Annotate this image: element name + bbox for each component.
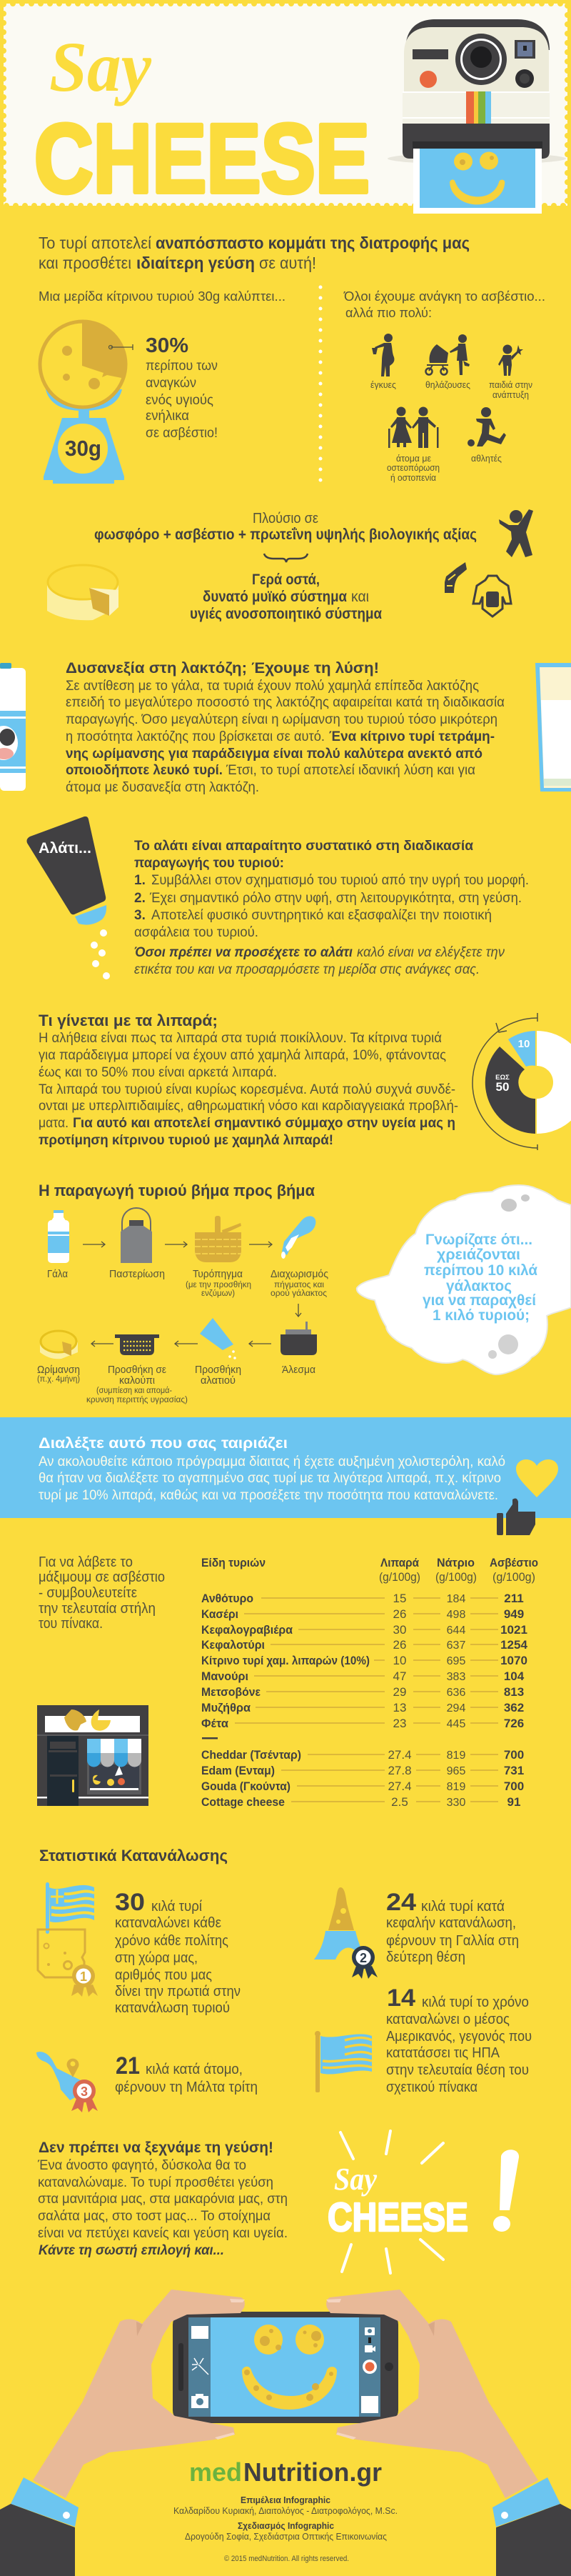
text block: taste: στα μανιτάρια μας, στα μακαρόνια μας, στη — [38, 2192, 288, 2207]
text block: taste — [37, 2140, 288, 2258]
text block: intro: και προσθέτει — [39, 254, 131, 272]
labels: steps row 1: Διαχωρισμός — [271, 1268, 328, 1280]
table: cheese types: 636 — [447, 1687, 465, 1699]
label: athletes: αθλητές — [471, 453, 502, 464]
table: cheese types: 26 — [393, 1607, 406, 1621]
stat: 14 kg USA: κατατάσσει τις ΗΠΑ — [386, 2045, 500, 2061]
icon: torso — [473, 576, 511, 616]
labels: steps row 2: αλατιού — [201, 1374, 236, 1387]
icon: cheese on scale — [40, 321, 127, 484]
labels: steps row 1: πήγματος και — [274, 1281, 324, 1289]
table: cheese types: 10 — [393, 1654, 406, 1667]
table: cheese types: 1070 — [500, 1654, 527, 1667]
icon: USA flag — [315, 2031, 372, 2092]
panel: choose band: Αν ακολουθείτε κάποιο πρόγραμμα δίαιτας ή έχετε αυξημένη χολιστερόλη, καλό — [39, 1454, 505, 1469]
icon: step salt — [200, 1318, 236, 1359]
stat: 21 kg Malta — [115, 2052, 258, 2095]
text block: taste: σαλάτα μας, στο τοστ μας... Το στοίχημα — [38, 2209, 271, 2224]
labels: steps row 2: Ωρίμανση — [37, 1364, 80, 1376]
panel: choose band: θα ήταν να διαλέξετε το αγαπημένο σας τυρί με τα λιγότερα λιπαρά, π.χ. κίτρινο — [39, 1471, 501, 1486]
icon: heart — [516, 1459, 558, 1497]
labels: steps row 2: καλούπι — [119, 1374, 155, 1387]
text block: lactose: νης ωρίμανσης για παράδειγμα είναι πολύ καλύτερα ανεκτό από — [66, 747, 482, 762]
table: cheese types: 29 — [393, 1685, 406, 1699]
icon: mother with stroller — [425, 334, 470, 375]
labels: steps row 1: Τυρόπηγμα — [193, 1268, 243, 1280]
text block: credits — [173, 2495, 398, 2563]
table: cheese types: Κασέρι — [201, 1607, 238, 1621]
text block: taste: Δεν πρέπει να ξεχνάμε τη γεύση! — [39, 2140, 273, 2156]
stat: 14 kg USA: σχετικού πίνακα — [386, 2080, 477, 2095]
callout: did you know cloud: γάλακτος — [446, 1278, 512, 1294]
stat: 30 kg Greece: καταναλώνει κάθε — [115, 1915, 221, 1931]
labels: steps row 2: (συμπίεση και απομά- — [96, 1387, 172, 1395]
stat: 24 kg France: 24 — [386, 1889, 416, 1916]
table: cheese types: 2.5 — [391, 1795, 408, 1809]
icon: cheese on scale: 30g — [65, 436, 101, 461]
labels: steps row 2: Προσθήκη — [195, 1364, 241, 1376]
text block: benefits: και — [351, 589, 369, 605]
text block: lactose: Ένα κίτρινο τυρί τετράμη- — [329, 729, 495, 744]
callout: did you know cloud: περίπου 10 κιλά — [424, 1262, 537, 1279]
table: cheese types: Edam (Ενταμ) — [201, 1764, 275, 1777]
table: cheese types: 695 — [447, 1655, 465, 1667]
table: cheese types: (g/100g) — [492, 1570, 535, 1584]
title: CHEESE — [34, 104, 370, 214]
text: who needs calcium: αλλά πιο πολύ: — [345, 306, 432, 320]
stat: 14 kg USA: στην τελευταία θέση του — [386, 2062, 529, 2078]
labels: steps row 2: Προσθήκη σε — [108, 1364, 166, 1376]
table: cheese types: 949 — [504, 1607, 524, 1621]
stat: 24 kg France: κεφαλήν κατανάλωση, — [386, 1915, 516, 1931]
arrow — [175, 1341, 198, 1347]
table: cheese types: 383 — [447, 1671, 465, 1683]
text block: salt: παραγωγής του τυριού: — [134, 856, 284, 871]
label: osteoporosis: ή οστοπενία — [390, 472, 436, 483]
table: cheese types: 819 — [447, 1749, 465, 1762]
text block: credits: Σχεδιασμός Infographic — [238, 2520, 334, 2531]
icon: salt shaker — [27, 817, 110, 979]
icon: cheese shop — [37, 1705, 148, 1806]
table: cheese types: Κεφαλοτύρι — [201, 1638, 265, 1652]
table: cheese types: 637 — [447, 1639, 465, 1652]
text: who needs calcium — [343, 289, 545, 320]
labels: steps row 1: ορού γάλακτος — [271, 1289, 327, 1298]
icon: Greek flag, cheese and first medal: 1 — [80, 1970, 87, 1984]
labels: steps row 2: (π.χ. 4μήνη) — [37, 1375, 80, 1384]
text block: salt: καλό είναι να ελέγξετε την — [357, 945, 505, 960]
icon: Greek flag, cheese and first medal — [38, 1882, 98, 1997]
panel: header — [4, 4, 567, 206]
labels: steps row 1: Παστερίωση — [109, 1268, 165, 1280]
text block: calcium advice: Για να λάβετε το — [39, 1554, 133, 1570]
icon: Malta and third medal — [36, 2052, 98, 2112]
callout: did you know cloud — [357, 1185, 571, 1374]
callout: 30 percent: ενός υγιούς — [146, 393, 213, 408]
arrow — [165, 1242, 187, 1247]
title: Say — [49, 27, 152, 106]
table: cheese types: Ανθότυρο — [201, 1592, 253, 1605]
stat: 30 kg Greece: αριθμός που μας — [115, 1967, 212, 1983]
text block: lactose: άτομα με δυσανεξία στη λακτόζη. — [66, 780, 259, 795]
text block: lactose: η ποσότητα λακτόζης που βρίσκεται σε αυτό. — [66, 729, 325, 744]
table: cheese types: (g/100g) — [435, 1570, 477, 1584]
stat: 24 kg France: φέρνουν τη Γαλλία στη — [386, 1933, 519, 1949]
table: cheese types: Gouda (Γκούντα) — [201, 1779, 290, 1793]
text block: lactose — [66, 660, 505, 795]
stat: 24 kg France: κιλά τυρί κατά — [421, 1899, 505, 1914]
callout: 30 percent: σε ασβέστιο! — [146, 426, 218, 441]
stat: 14 kg USA: Αμερικανός, γεγονός που — [386, 2029, 532, 2045]
callout: 30 percent: περίπου των — [146, 359, 218, 374]
table: cheese types: 498 — [447, 1609, 465, 1621]
text block: benefits: Γερά οστά, — [252, 571, 320, 588]
stat: 21 kg Malta: 21 — [116, 2052, 140, 2080]
callout: 30 percent: αναγκών — [146, 376, 196, 391]
icon: step mould — [115, 1334, 159, 1355]
icon: cheese wheel — [47, 565, 118, 620]
text block: taste: Κάντε τη σωστή επιλογή και... — [39, 2243, 224, 2258]
icon: pregnant woman — [372, 334, 394, 376]
text block: rich in — [94, 511, 477, 543]
table: cheese types: 23 — [393, 1717, 406, 1730]
icon: left hand and sleeve — [0, 2290, 245, 2576]
table: cheese types: 27.4 — [388, 1748, 412, 1762]
table: cheese types: 644 — [447, 1624, 465, 1637]
text: serving lead-in: Μια μερίδα κίτρινου τυριού 30g καλύπτει... — [39, 289, 286, 304]
label: breastfeeding: θηλάζουσες — [425, 379, 470, 390]
callout: did you know cloud: χρειάζονται — [437, 1247, 520, 1263]
text block: lactose: επειδή το μεγαλύτερο ποσοστό της λακτόζης αφαιρείται κατά τη διαδικασία — [66, 695, 505, 710]
icon: France cheese tower and second medal — [314, 1887, 378, 1979]
table: cheese types: 294 — [447, 1702, 465, 1714]
heading: statistics: Στατιστικά Κατανάλωσης — [39, 1847, 228, 1864]
table: cheese types: 700 — [504, 1748, 524, 1762]
stat: 14 kg USA — [386, 1985, 532, 2095]
text block: salt: 2. — [134, 891, 146, 906]
label: children: παιδιά στην — [489, 379, 532, 390]
text block: fats: Για αυτό και αποτελεί σημαντικό σύμμαχο στην υγεία μας η — [73, 1116, 455, 1131]
icon: step milk — [48, 1210, 69, 1263]
callout: did you know cloud: για να παραχθεί — [423, 1292, 536, 1309]
icon: jumping man — [499, 509, 533, 557]
text block: lactose: Σε αντίθεση με το γάλα, τα τυριά έχουν πολύ χαμηλά επίπεδα λακτόζης — [66, 679, 479, 694]
text block: calcium advice: - συμβουλευτείτε — [39, 1585, 137, 1601]
chart: fat donut: 50 — [496, 1080, 509, 1094]
chart: fat donut — [473, 1013, 571, 1150]
arrow — [249, 1341, 271, 1347]
text block: salt: Έχει σημαντικό ρόλο στην υφή, στη λειτουργικότητα, στη γεύση. — [149, 891, 522, 906]
text block: salt: Το αλάτι είναι απαραίτητο συστατικό στη διαδικασία — [134, 839, 473, 854]
icon: glass of milk — [535, 663, 571, 792]
icon: knee joint — [445, 562, 467, 593]
text block: benefits — [190, 571, 382, 622]
text block: fats: Η αλήθεια είναι πως τα λιπαρά στα τυριά ποικίλλουν. Τα κίτρινα τυριά — [39, 1031, 442, 1046]
icon: salt shaker: Αλάτι... — [39, 840, 91, 857]
table: cheese types: 30 — [393, 1623, 406, 1637]
labels: steps row 2 — [37, 1364, 315, 1404]
icon: elderly couple — [388, 407, 438, 448]
table: cheese types: 104 — [504, 1669, 525, 1683]
text block: salt: ετικέτα του και να προσαρμόσετε τη μερίδα στις ανάγκες σας. — [134, 962, 480, 977]
text block: fats: Τα λιπαρά του τυριού είναι κυρίως κορεσμένα. Αυτά πολύ συχνά συνδέ- — [39, 1082, 455, 1097]
icon: step pasteurisation — [121, 1208, 152, 1263]
callout: say cheese white: Say — [334, 2162, 377, 2197]
label: children — [489, 379, 532, 400]
table: cheese types: 211 — [504, 1592, 524, 1605]
table: cheese types: Cheddar (Τσένταρ) — [201, 1748, 301, 1762]
heading: production: Η παραγωγή τυριού βήμα προς βήμα — [39, 1182, 315, 1199]
text block: calcium advice: μάξιμουμ σε ασβέστιο — [39, 1569, 165, 1585]
label: osteoporosis — [387, 453, 440, 483]
table: cheese types: (g/100g) — [379, 1570, 420, 1584]
text block: credits: Επιμέλεια Infographic — [241, 2495, 330, 2505]
text block: calcium advice: του πίνακα. — [39, 1616, 103, 1632]
chart: fat donut: 10 — [518, 1038, 530, 1050]
stat: 24 kg France — [386, 1889, 519, 1965]
table: cheese types: Μανούρι — [201, 1669, 248, 1683]
text block: credits: Δρογούδη Σοφία, Σχεδιάστρια Οπτικής Επικοινωνίας — [185, 2531, 387, 2542]
icon: phone — [173, 2312, 398, 2423]
icon: child — [498, 344, 523, 376]
labels: steps row 1: (με την προσθήκη — [186, 1281, 251, 1289]
stat: 30 kg Greece: κατανάλωση τυριού — [115, 2000, 230, 2016]
label: pregnant: έγκυες — [370, 379, 396, 390]
table: cheese types: 819 — [447, 1781, 465, 1793]
table: cheese types — [201, 1556, 538, 1809]
stat: 14 kg USA: 14 — [387, 1985, 415, 2012]
text block: lactose: Έτσι, το τυρί αποτελεί ιδανική λύση και για — [226, 763, 475, 778]
text block: intro — [39, 234, 470, 272]
icon: step curd basket — [195, 1216, 241, 1262]
text block: lactose: παραγωγής. Όσο μεγαλύτερη είναι η ωρίμανση του τυριού τόσο μικρότερη — [66, 712, 497, 727]
text block: salt — [134, 839, 529, 977]
arrow — [83, 1242, 105, 1247]
table: cheese types: Κεφαλογραβιέρα — [201, 1623, 293, 1637]
text block: credits: © 2015 medNutrition. All rights reserved. — [224, 2555, 349, 2563]
callout: did you know cloud: 1 κιλό τυριού; — [433, 1307, 530, 1324]
labels: steps row 1: Γάλα — [47, 1268, 68, 1280]
table: cheese types: 27.4 — [388, 1779, 412, 1793]
text: who needs calcium: Όλοι έχουμε ανάγκη το ασβέστιο... — [343, 289, 545, 304]
text block: fats: ονται με υπερλιπιδαιμίες, αθηρωματική νόσο και καρδιαγγειακά προβλή- — [39, 1099, 458, 1114]
text block: fats: έως και το 50% που είναι αρκετά λιπαρά. — [39, 1065, 277, 1080]
table: cheese types: 15 — [393, 1592, 406, 1605]
stat: 21 kg Malta: φέρνουν τη Μάλτα τρίτη — [115, 2080, 258, 2095]
table: cheese types: 47 — [393, 1669, 406, 1683]
icon: right hand and sleeve — [326, 2290, 571, 2576]
icon: step ripening — [40, 1331, 78, 1359]
callout: say cheese white — [328, 2131, 519, 2273]
text block: fats: για παράδειγμα μπορεί να έχουν από χαμηλά λιπαρά, 10%, φτάνοντας — [39, 1048, 446, 1063]
text block: fats: προτίμηση κίτρινου τυριού με χαμηλά λιπαρά! — [39, 1133, 333, 1148]
icon: thumbs up — [497, 1499, 535, 1535]
text block: taste: καταναλώναμε. Το τυρί προσθέτει γεύση — [38, 2175, 273, 2190]
labels: steps row 1 — [47, 1268, 328, 1298]
panel: choose band: τυρί με 10% λιπαρά, καθώς και να προσέξετε την ποσότητα που καταναλώνετε. — [39, 1488, 498, 1503]
table: cheese types: Μετσοβόνε — [201, 1685, 261, 1699]
table: cheese types: 362 — [504, 1701, 524, 1714]
panel: choose band — [0, 1417, 571, 1518]
labels: steps row 2: κρυνση περιττής υγρασίας) — [86, 1396, 188, 1404]
text block: intro: Το τυρί αποτελεί — [39, 234, 151, 252]
logo: medNutrition: Nutrition.gr — [243, 2457, 382, 2487]
text block: credits: Καλδαρίδου Κυριακή, Διαιτολόγος - Διατροφολόγος, M.Sc. — [173, 2505, 398, 2516]
label: osteoporosis: οστεοπόρωση — [387, 462, 440, 473]
arrow — [295, 1304, 301, 1317]
chart: fat donut: ΕΩΣ — [495, 1074, 510, 1082]
text block: taste: είναι να πετύχει κανείς και γεύση και υγεία. — [38, 2226, 288, 2241]
table: cheese types: 13 — [393, 1701, 406, 1714]
text block: fats: ματα. — [39, 1116, 69, 1131]
stat: 30 kg Greece: κιλά τυρί — [151, 1899, 203, 1914]
table: cheese types: 445 — [447, 1718, 465, 1730]
label: children: ανάπτυξη — [492, 389, 529, 400]
logo: medNutrition: med — [189, 2457, 242, 2487]
text block: taste: Ένα άνοστο φαγητό, δύσκολα θα το — [37, 2158, 246, 2173]
icon: instant camera — [388, 19, 566, 164]
table: cheese types: 330 — [447, 1797, 465, 1809]
labels: steps row 2: Άλεσμα — [282, 1364, 315, 1376]
stat: 24 kg France: δεύτερη θέση — [386, 1950, 465, 1965]
table: cheese types: 27.8 — [388, 1764, 412, 1777]
table: cheese types: 26 — [393, 1638, 406, 1652]
stat: 30 kg Greece: δίνει την πρωτιά στην — [115, 1984, 241, 2000]
text block: lactose: οποιοδήποτε λευκό τυρί. — [66, 763, 223, 778]
text block: salt: Συμβάλλει στον σχηματισμό του τυριού από την υγρή του μορφή. — [151, 873, 529, 888]
text block: salt: Όσοι πρέπει να προσέχετε το αλάτι — [134, 945, 353, 960]
text block: benefits: υγιές ανοσοποιητικό σύστημα — [190, 606, 382, 622]
text block: intro: σε αυτή! — [259, 254, 316, 272]
table: cheese types: 726 — [504, 1717, 524, 1730]
table: cheese types: 184 — [447, 1593, 465, 1605]
text block: salt: 1. — [134, 873, 146, 888]
text block: calcium advice — [39, 1554, 165, 1632]
text block: rich in: Πλούσιο σε — [253, 511, 318, 526]
text block: lactose: Δυσανεξία στη λακτόζη; Έχουμε τη λύση! — [66, 660, 379, 677]
title — [34, 27, 370, 214]
icon: step dropper — [281, 1216, 315, 1259]
icon: step pot — [281, 1322, 317, 1355]
text block: salt: 3. — [134, 908, 146, 923]
table: cheese types: 700 — [504, 1779, 524, 1793]
text block: salt: ασφάλεια του τυριού. — [134, 925, 258, 940]
icon: Malta and third medal: 3 — [81, 2085, 88, 2099]
stat: 14 kg USA: καταναλώνει ο μέσος — [386, 2012, 510, 2027]
text block: rich in: φωσφόρο + ασβέστιο + πρωτεΐνη υψηλής βιολογικής αξίας — [94, 526, 477, 543]
text block: fats: Τι γίνεται με τα λιπαρά; — [39, 1012, 218, 1029]
text block: intro: αναπόσπαστο κομμάτι της διατροφής μας — [156, 234, 470, 252]
panel: choose band: Διαλέξτε αυτό που σας ταιριάζει — [39, 1435, 288, 1452]
text block: calcium advice: την τελευταία στήλη — [39, 1601, 156, 1617]
arrow — [249, 1242, 272, 1247]
icon: brace — [264, 554, 308, 562]
table: cheese types: Νάτριο — [437, 1556, 475, 1569]
table: cheese types: Λιπαρά — [380, 1556, 419, 1569]
text block: salt: Αποτελεί φυσικό συντηρητικό και εξασφαλίζει την ποιοτική — [151, 908, 492, 923]
table: cheese types: Cottage cheese — [201, 1795, 285, 1809]
callout: 30 percent: ενήλικα — [146, 409, 189, 424]
callout: 30 percent — [108, 334, 218, 441]
text block: benefits: δυνατό μυϊκό σύστημα — [203, 589, 347, 605]
stat: 30 kg Greece: 30 — [115, 1889, 145, 1916]
table: cheese types: 965 — [447, 1765, 465, 1777]
table: cheese types: Κίτρινο τυρί χαμ. λιπαρών (10%) — [201, 1654, 370, 1667]
table: cheese types: Ασβέστιο — [490, 1556, 538, 1569]
stat: 21 kg Malta: κιλά κατά άτομο, — [146, 2062, 243, 2077]
text block: fats — [39, 1012, 458, 1148]
label: osteoporosis: άτομα με — [396, 453, 431, 464]
icon: athlete — [468, 407, 506, 446]
table: cheese types: 1254 — [500, 1638, 527, 1652]
callout: say cheese white: CHEESE — [328, 2195, 468, 2240]
arrow — [91, 1341, 113, 1347]
icon: photo with cheese smile — [413, 149, 542, 214]
stat: 14 kg USA: κιλά τυρί το χρόνο — [422, 1995, 529, 2010]
table: cheese types: Είδη τυριών — [201, 1556, 266, 1569]
text block: intro: ιδιαίτερη γεύση — [136, 254, 255, 272]
stat: 30 kg Greece: στη χώρα μας, — [115, 1950, 198, 1966]
table: cheese types: 91 — [507, 1795, 520, 1809]
icon: milk bottle — [0, 663, 26, 791]
icon: France cheese tower and second medal: 2 — [360, 1951, 367, 1965]
callout: did you know cloud: Γνωρίζατε ότι... — [425, 1232, 532, 1248]
table: cheese types: 731 — [504, 1764, 524, 1777]
table: cheese types: Μυζήθρα — [201, 1701, 251, 1714]
table: cheese types: 1021 — [500, 1623, 527, 1637]
callout: 30 percent: 30% — [146, 334, 188, 357]
labels: steps row 1: ενζύμων) — [201, 1289, 235, 1298]
table: cheese types: Φέτα — [201, 1717, 229, 1730]
table: cheese types: 813 — [504, 1685, 524, 1699]
stat: 30 kg Greece — [115, 1889, 241, 2016]
stat: 30 kg Greece: χρόνο κάθε πολίτης — [115, 1933, 228, 1949]
